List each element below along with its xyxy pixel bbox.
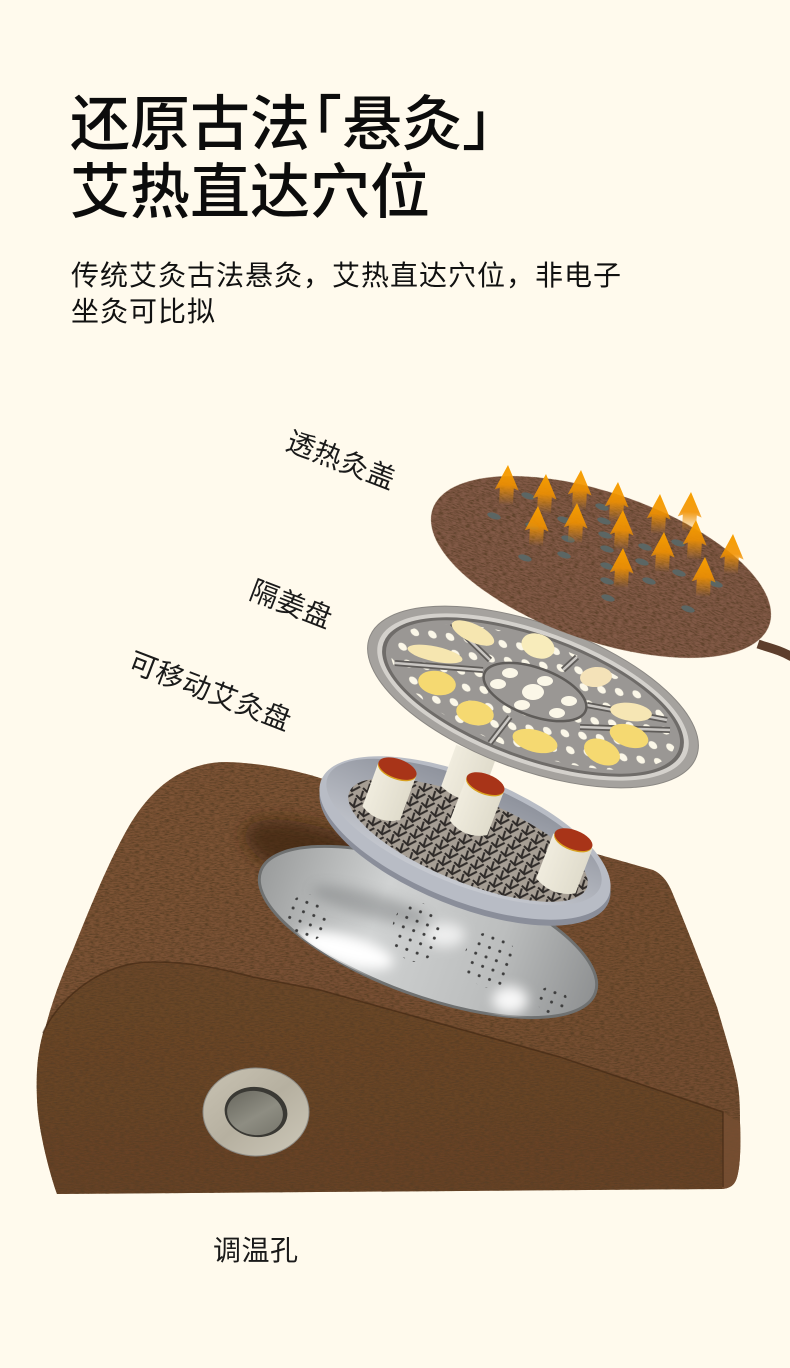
plate dividers <box>395 623 670 743</box>
cushion front face <box>37 962 740 1194</box>
label: heat lid: 透热灸盖 <box>282 426 400 496</box>
subtitle: 坐灸可比拟 <box>71 296 216 327</box>
moxa stick 2 <box>448 768 508 841</box>
ginger slices <box>448 615 498 651</box>
cushion base <box>37 762 740 1194</box>
recess shadow <box>235 803 415 917</box>
metal bowl <box>258 844 598 1020</box>
front seam <box>43 962 723 1187</box>
title: 艾热直达穴位 <box>70 159 430 226</box>
cushion right side strip <box>722 1112 740 1189</box>
plate hub <box>476 651 594 733</box>
moxa tray <box>298 722 632 960</box>
bowl perforations <box>287 894 327 942</box>
title: 还原古法「悬灸」 <box>70 91 522 158</box>
moxa stick 1 <box>360 753 420 826</box>
bowl highlights <box>293 923 397 977</box>
moxa stick 3 <box>534 823 597 899</box>
lid holes <box>486 491 724 614</box>
label: moxa tray: 可移动艾灸盘 <box>125 646 296 737</box>
heat arrows <box>494 464 745 598</box>
title <box>70 91 522 226</box>
tray floor with needles <box>334 753 602 927</box>
ginger plate <box>345 569 721 825</box>
heat lid <box>409 439 790 695</box>
moxa stick behind plate <box>440 745 496 805</box>
product illustration <box>36 465 790 1194</box>
cushion top surface <box>38 762 740 1130</box>
label: temperature vent: 调温孔 <box>213 1235 299 1266</box>
label: ginger plate: 隔姜盘 <box>246 575 337 634</box>
subtitle: 传统艾灸古法悬灸，艾热直达穴位，非电子 <box>71 260 622 291</box>
subtitle <box>71 260 622 327</box>
lid body <box>409 439 790 695</box>
temperature vent <box>203 1068 309 1156</box>
lid cord <box>758 644 790 657</box>
